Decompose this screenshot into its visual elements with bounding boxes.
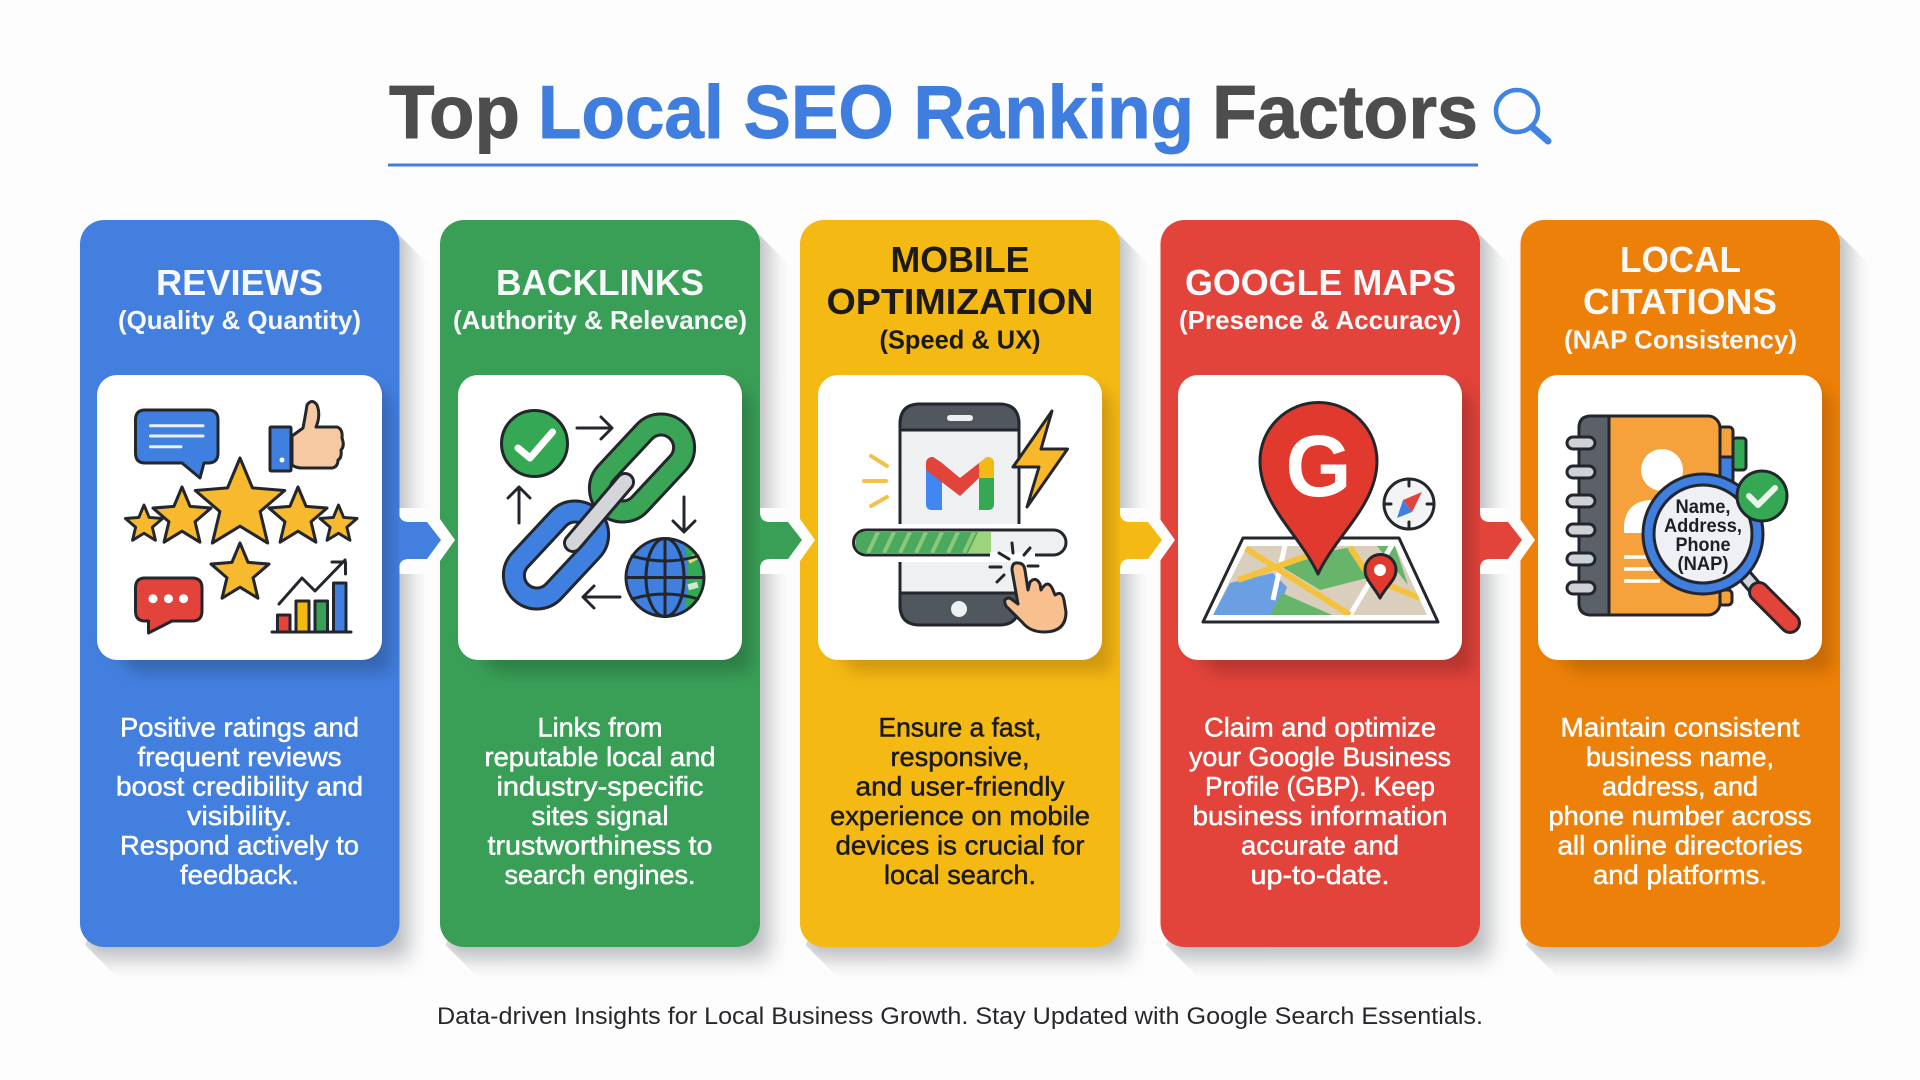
heading: local citations: CITATIONS xyxy=(1583,281,1777,322)
icon: magnifying glass with NAP xyxy=(1643,474,1790,623)
heading: backlinks: BACKLINKS xyxy=(496,262,704,303)
body text: reviews: frequent reviews xyxy=(138,742,342,772)
body text: mobile optimization xyxy=(830,712,1090,890)
icon card: reviews xyxy=(97,375,382,660)
title: Top xyxy=(389,70,520,154)
body text: backlinks: industry-specific xyxy=(496,772,704,802)
NAP label: (NAP) xyxy=(1678,554,1728,575)
body text: google maps: your Google Business xyxy=(1189,742,1451,772)
body text: backlinks: reputable local and xyxy=(484,742,716,772)
icon: cycle arrows xyxy=(508,417,695,608)
body text: local citations: address, and xyxy=(1602,772,1758,802)
body text: google maps: accurate and xyxy=(1241,830,1399,860)
title: Factors xyxy=(1212,70,1478,154)
subheading: quality and quantity: (Quality & Quantity) xyxy=(118,305,361,335)
heading: local citations: LOCAL xyxy=(1620,239,1741,280)
title underline xyxy=(388,164,1478,166)
title: Local SEO Ranking xyxy=(538,70,1194,154)
icon: chain links xyxy=(504,415,694,608)
heading: mobile optimization: MOBILE xyxy=(890,239,1030,280)
subheading: presence and accuracy: (Presence & Accuracy) xyxy=(1179,305,1461,335)
body text: local citations: Maintain consistent xyxy=(1560,712,1800,742)
body text: local citations xyxy=(1548,712,1812,890)
icon: red speech bubble xyxy=(136,578,202,633)
icon card: backlinks xyxy=(458,375,742,660)
body text: reviews: visibility. xyxy=(187,801,292,831)
body text: mobile optimization: local search. xyxy=(884,860,1036,890)
body text: mobile optimization: devices is crucial for xyxy=(836,830,1084,860)
body text: local citations: phone number across xyxy=(1548,801,1812,831)
panel: local citations xyxy=(1520,220,1840,947)
subheading: speed and ux: (Speed & UX) xyxy=(880,324,1040,354)
NAP label xyxy=(1664,497,1742,575)
body text: reviews xyxy=(116,712,363,890)
icon card: mobile optimization xyxy=(818,375,1102,660)
icon: green check circle xyxy=(502,410,568,476)
body text: backlinks: Links from xyxy=(538,712,662,742)
subheading: authority and relevance: (Authority & Relevance) xyxy=(453,305,747,335)
body text: google maps: Profile (GBP). Keep xyxy=(1205,772,1435,802)
footer note: Data-driven Insights for Local Business Growth. Stay Updated with Google Search Essentials. xyxy=(437,1003,1483,1030)
icon card: google maps xyxy=(1178,375,1462,660)
body text: local citations: and platforms. xyxy=(1593,860,1767,890)
icon: gmail logo xyxy=(926,457,994,510)
body text: reviews: Positive ratings and xyxy=(120,712,359,742)
body text: mobile optimization: Ensure a fast, xyxy=(878,712,1042,742)
body text: backlinks: trustworthiness to xyxy=(488,830,712,860)
icon: tapping hand xyxy=(990,543,1066,632)
heading: reviews: REVIEWS xyxy=(156,262,323,303)
heading: local citations xyxy=(1583,239,1777,322)
arrow: backlinks to mobile optimization xyxy=(760,508,815,574)
NAP label: Name, xyxy=(1676,497,1730,518)
heading: mobile optimization xyxy=(826,239,1094,322)
body text: local citations: business name, xyxy=(1586,742,1774,772)
body text: local citations: all online directories xyxy=(1558,830,1802,860)
body text: google maps: up-to-date. xyxy=(1250,860,1390,890)
body text: mobile optimization: and user-friendly xyxy=(856,772,1065,802)
icon: title magnifying glass xyxy=(1496,90,1548,141)
body text: reviews: Respond actively to xyxy=(120,830,359,860)
icon: map pin with G: G xyxy=(1286,418,1352,515)
heading: mobile optimization: OPTIMIZATION xyxy=(826,281,1094,322)
body text: mobile optimization: experience on mobile xyxy=(830,801,1090,831)
arrow: reviews to backlinks xyxy=(399,508,455,574)
icon: folded map xyxy=(1200,538,1440,622)
icon: thumbs up xyxy=(270,402,343,471)
body text: google maps: Claim and optimize xyxy=(1204,712,1436,742)
body text: reviews: boost credibility and xyxy=(116,772,363,802)
NAP label: Address, xyxy=(1664,516,1742,537)
icon: five gold stars xyxy=(125,458,357,598)
arrow: google maps to local citations xyxy=(1480,508,1535,574)
icon: green check badge xyxy=(1737,471,1787,521)
icon: compass xyxy=(1384,479,1434,529)
body text: backlinks: search engines. xyxy=(504,860,696,890)
title xyxy=(389,70,1478,154)
NAP label: Phone xyxy=(1676,535,1730,556)
icon: lightning bolt xyxy=(1013,411,1068,507)
icon: blue speech bubble xyxy=(136,410,218,478)
panel: google maps xyxy=(1160,220,1480,947)
icon card: local citations xyxy=(1538,375,1822,660)
arrow: mobile optimization to google maps xyxy=(1120,508,1175,574)
icon: rising bar chart xyxy=(272,560,351,632)
icon: smartphone xyxy=(895,404,1025,625)
panel: reviews xyxy=(80,220,400,947)
panel: backlinks xyxy=(440,220,760,947)
icon: small map pin xyxy=(1365,554,1396,598)
panel: mobile optimization xyxy=(800,220,1120,947)
heading: google maps: GOOGLE MAPS xyxy=(1185,262,1456,303)
icon: progress bar xyxy=(854,530,1066,558)
icon: speed lines xyxy=(864,456,887,506)
icon: address book xyxy=(1567,416,1746,615)
body text: reviews: feedback. xyxy=(180,860,299,890)
body text: backlinks xyxy=(484,712,716,890)
body text: google maps xyxy=(1189,712,1451,890)
body text: mobile optimization: responsive, xyxy=(890,742,1030,772)
icon: globe xyxy=(626,538,704,616)
subheading: nap consistency: (NAP Consistency) xyxy=(1564,324,1797,354)
body text: google maps: business information xyxy=(1192,801,1448,831)
body text: backlinks: sites signal xyxy=(532,801,668,831)
icon: map pin with G xyxy=(1260,403,1377,574)
